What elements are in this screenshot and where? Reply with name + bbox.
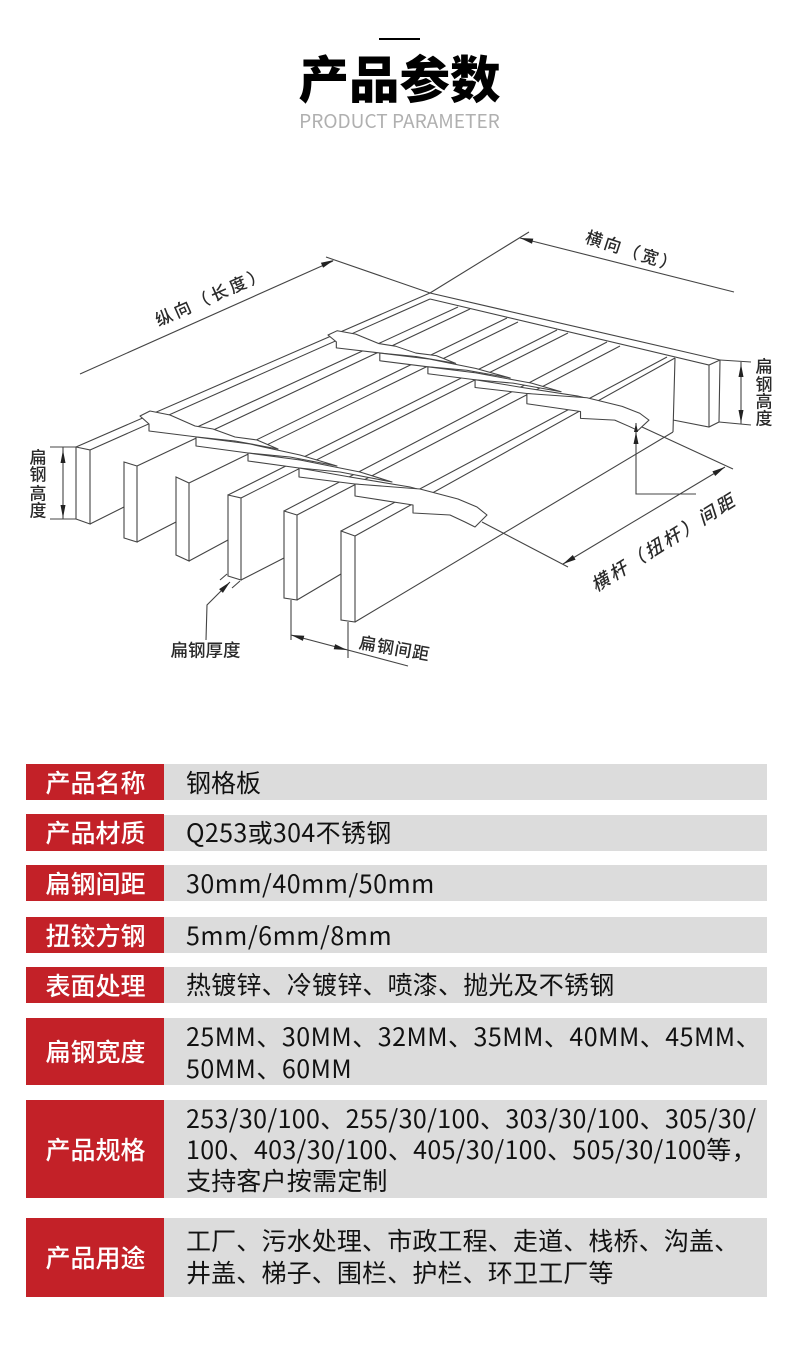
label: flat bar width: 扁钢宽度: [45, 1033, 146, 1069]
dimension: width: [430, 223, 734, 293]
row: flat bar spacing: [26, 864, 767, 901]
label: surface treatment: 表面处理: [45, 966, 146, 1002]
value: flat bar width: 25MM、30MM、32MM、35MM、40MM、45MM、: [186, 1018, 761, 1054]
value: specification: [164, 1100, 767, 1198]
dimension: bar thickness: [170, 574, 240, 662]
row: twisted bar: [26, 916, 767, 953]
bearing bar top lines: [76, 293, 675, 536]
value: twisted bar: 5mm/6mm/8mm: [186, 917, 392, 953]
bearing bars front ends: [76, 432, 673, 622]
value: usage: 工厂、污水处理、市政工程、走道、栈桥、沟盖、: [186, 1222, 739, 1258]
row: surface treatment: [26, 966, 767, 1003]
dimension: cross bar spacing: [482, 423, 740, 598]
value: name: 钢格板: [186, 764, 261, 800]
front twisted cross bar: [140, 411, 487, 527]
value: flat bar spacing: [164, 865, 767, 901]
dimension: right bar height: 扁: [756, 352, 772, 378]
value: surface treatment: [164, 967, 767, 1003]
parameter table: [26, 764, 767, 1297]
subtitle: PRODUCT PARAMETER: [299, 106, 500, 134]
value: flat bar width: 50MM、60MM: [186, 1050, 352, 1086]
value: material: Q253或304不锈钢: [186, 814, 392, 850]
title: 产品参数: [298, 39, 500, 113]
dimension: right bar height: 钢: [756, 370, 772, 396]
value: flat bar width: [164, 1018, 767, 1085]
label: twisted bar: 扭铰方钢: [45, 916, 146, 952]
label: flat bar spacing: 扁钢间距: [45, 864, 146, 900]
diagram: steel grating dimensions: [30, 223, 772, 666]
label: usage: 产品用途: [45, 1239, 146, 1275]
row: name: [26, 764, 767, 800]
dimension: right bar height: 度: [756, 404, 772, 430]
dimension: left bar height: [30, 444, 76, 522]
dimension: left bar height: 度: [30, 496, 46, 522]
value: twisted bar: [164, 917, 767, 953]
value: material: [164, 815, 767, 851]
label: usage: [26, 1218, 164, 1297]
row: flat bar width: [26, 1018, 767, 1086]
value: name: [164, 764, 767, 800]
dimension: right bar height: 高: [756, 388, 772, 412]
row: usage: [26, 1218, 767, 1297]
dimension: bar spacing: 扁钢间距: [357, 628, 433, 666]
row: material: [26, 814, 767, 851]
label: flat bar width: [26, 1018, 164, 1085]
header: [298, 38, 500, 134]
label: specification: 产品规格: [45, 1130, 146, 1166]
value: flat bar spacing: 30mm/40mm/50mm: [186, 865, 435, 901]
dimension: left bar height: 钢: [30, 460, 46, 486]
dimension: bar thickness: 扁钢厚度: [170, 638, 240, 662]
dimension: bar spacing: [291, 600, 433, 666]
dimension: cross bar spacing: 横杆（扭杆）间距: [590, 484, 740, 598]
dimension: length: [80, 259, 334, 374]
rear twisted cross bar: [328, 331, 649, 430]
value: specification: 支持客户按需定制: [186, 1162, 388, 1198]
dimension: length: 纵向（长度）: [151, 259, 271, 331]
dimension: left bar height: 高: [30, 480, 46, 504]
value: usage: 井盖、梯子、围栏、护栏、环卫工厂等: [186, 1254, 614, 1290]
dimension: right bar height: [719, 352, 772, 430]
dimension: left bar height: 扁: [30, 444, 46, 468]
value: surface treatment: 热镀锌、冷镀锌、喷漆、抛光及不锈钢: [186, 966, 614, 1002]
value: usage: [164, 1218, 767, 1297]
far edge and far bar: [326, 257, 720, 432]
dimension: width: 横向（宽）: [583, 223, 683, 277]
value: specification: 253/30/100、255/30/100、303/30/100、305/30/: [186, 1100, 757, 1136]
row: specification: [26, 1100, 767, 1198]
value: specification: 100、403/30/100、405/30/100、505/30/100等，: [186, 1131, 757, 1167]
label: name: 产品名称: [45, 764, 146, 800]
label: material: 产品材质: [45, 814, 146, 850]
label: specification: [26, 1100, 164, 1198]
heading accent bar: [379, 38, 420, 40]
